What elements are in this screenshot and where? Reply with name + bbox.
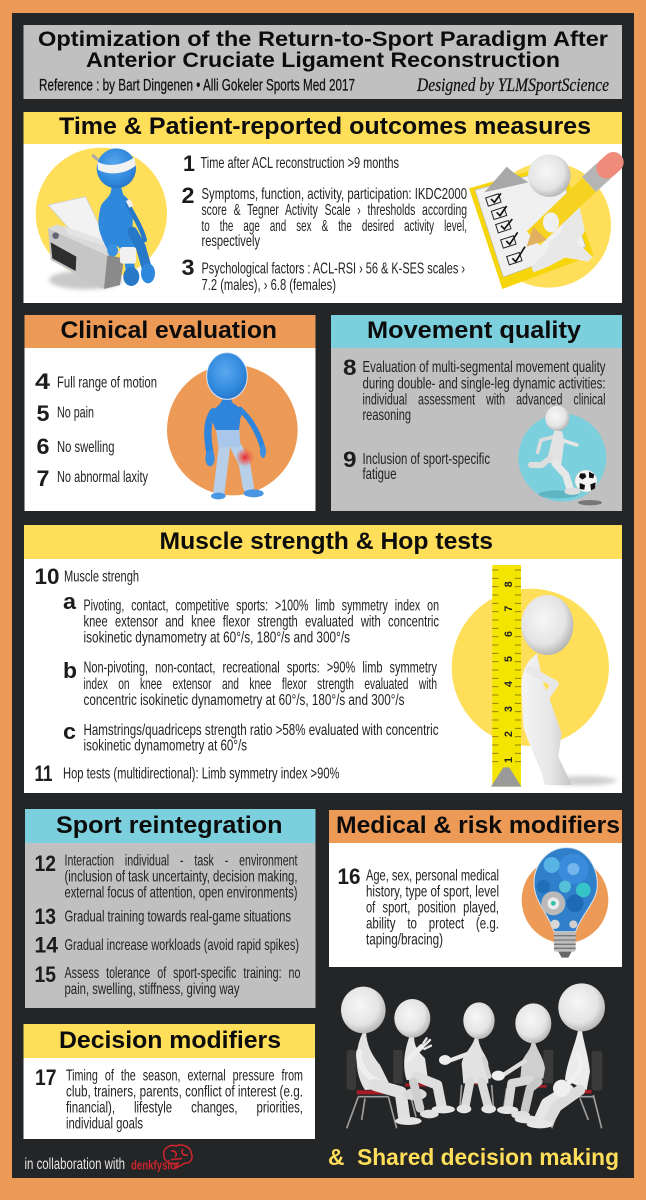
panel: clinical evaluation [24,315,316,511]
panel body [25,809,316,1008]
collaboration text: in collaboration with [24,1156,125,1173]
item b text: index on knee extensor and knee flexor strength evaluated with [84,676,437,693]
heading: Clinical evaluation [60,317,277,344]
heading: Sport reintegration [56,812,282,839]
item 4 text: Full range of motion [57,374,157,392]
item 15 text: pain, swelling, stiffness, giving way [64,981,240,998]
title panel background [24,25,622,99]
number 13: 13 [34,904,56,929]
illustration: figure leaning on measuring tape: 5 [503,656,515,662]
illustration: figure leaning on measuring tape: 7 [503,606,515,612]
shared decision making caption: & Shared decision making [328,1144,619,1170]
number 12: 12 [34,851,56,876]
number 8: 8 [343,355,356,380]
item a text: knee extensor and knee flexor strength evaluated with concentric [84,614,439,630]
item 14 text: Gradual increase workloads (avoid rapid spikes) [64,937,299,954]
item 12 text: external focus of attention, open environments) [64,884,298,902]
item 7 text: No abnormal laxity [57,469,148,486]
illustration: figure leaning on measuring tape: 1 [503,757,515,763]
item 2 text: respectively [202,233,260,250]
item 12 text: (inclusion of task uncertainty, decision making, [64,868,298,886]
item c text [84,722,438,754]
designer credit: Designed by YLMSportScience [416,75,609,96]
item 13 text: Gradual training towards real-game situations [64,908,291,926]
item 10 text: Muscle strengh [64,568,139,586]
letter c: c [63,719,76,744]
item 9 [343,447,490,483]
panel body [329,810,622,967]
number 1: 1 [183,151,195,176]
panel: movement quality [331,315,622,511]
heading: Time & Patient-reported outcomes measures [59,113,591,140]
item 17 text: club, trainers, parents, conflict of interest (e.g. [66,1084,303,1100]
item 16 text: ability to protect (e.g. [366,916,499,932]
illustration: figure leaning on measuring tape: 2 [503,731,515,737]
main title [38,28,608,72]
item 2 text: score & Tegner Activity Scale › thresholds according [202,202,467,219]
item 5 [36,401,94,426]
item 1 text: Time after ACL reconstruction >9 months [200,155,399,172]
item 7 [36,466,148,491]
letter b: b [63,658,77,683]
heading: Muscle strength & Hop tests [160,528,493,555]
item 2 text [202,186,467,250]
panel header [331,315,622,348]
item b [63,658,437,709]
item 16 text: history, type of sport, level [366,884,499,900]
item 2 text: to the age and sex & the desired activity level, [202,218,467,235]
panel header [25,809,316,843]
item c text: isokinetic dynamometry at 60°/s [84,738,247,754]
item c text: Hamstrings/quadriceps strength ratio >58% evaluated with concentric [84,722,438,739]
number 16: 16 [338,864,360,889]
panel: decision modifiers [24,1024,315,1139]
item 14 [34,932,299,958]
item c [63,719,438,754]
item 13 [34,904,291,929]
item 17 text: financial), lifestyle changes, priorities, [66,1100,303,1116]
illustration: injured figure on exam device [36,148,167,289]
number 15: 15 [34,962,56,987]
item 2 [182,183,467,250]
item 9 text: fatigue [362,466,397,483]
item 12 text [64,852,298,902]
item a text: Pivoting, contact, competitive sports: >100% limb symmetry index on [84,598,439,614]
figure 4 [492,1003,551,1119]
figure 1 [341,987,427,1125]
denkfysio name: denkfysio [131,1158,176,1172]
item 3 [182,255,465,294]
number 11: 11 [34,761,52,786]
chairs [347,1050,602,1128]
number 9: 9 [343,447,356,472]
number 7: 7 [36,466,50,491]
heading: Movement quality [367,317,582,344]
illustration: five figures in a discussion circle [341,983,605,1128]
panel header [329,810,622,843]
figure 5 [515,983,605,1128]
figure 2 [394,999,455,1118]
panel: muscle strength and hop tests [24,525,622,793]
heading: Medical & risk modifiers [336,812,620,839]
item 17 text: Timing of the season, external pressure from [66,1068,303,1084]
item 8 text [362,359,606,424]
item 8 [343,355,606,424]
panel body [331,315,622,511]
item b text: concentric isokinetic dynamometry at 60°/s, 180°/s and 300°/s [84,692,404,709]
panel: medical and risk modifiers [329,810,622,967]
illustration: blue figure with red knee [167,353,298,499]
number 5: 5 [36,401,50,426]
item 1 [183,151,399,176]
item 15 text [64,965,301,998]
illustration: figure leaning on measuring tape [452,565,617,787]
item b text: Non-pivoting, non-contact, recreational sports: >90% limb symmetry [84,660,437,676]
panel: sport reintegration [25,809,316,1008]
panel header [24,525,622,559]
illustration: figure kicking soccer ball [518,406,606,505]
illustration: figure leaning on measuring tape: 4 [503,681,515,687]
figure 3 [439,1002,496,1113]
panel body [24,525,622,793]
title block [24,25,622,99]
number 2: 2 [182,183,194,208]
item 9 text [362,451,490,483]
panel body [24,315,316,511]
illustration: figure leaning on measuring tape: 6 [503,631,515,637]
main title: Optimization of the Return-to-Sport Paradigm After [38,28,608,51]
panel header [24,315,316,348]
item a [63,589,439,646]
item 2 text: Symptoms, function, activity, participation: IKDC2000 [202,186,467,203]
illustration: figure leaning on measuring tape: 3 [503,706,515,712]
item 15 text: Assess tolerance of sport-specific training: no [64,965,301,982]
item 6 [36,434,114,459]
icon: brain logo [164,1145,192,1168]
illustration: figure writing on checklist with pencil [469,154,613,289]
number 10: 10 [34,564,60,589]
item a text [84,598,439,646]
item 15 [34,962,301,998]
collaboration credit [24,1145,192,1173]
item 11 text: Hop tests (multidirectional): Limb symmetry index >90% [63,766,340,782]
main title: Anterior Cruciate Ligament Reconstruction [86,49,560,72]
item 17 text [66,1068,303,1132]
number 17: 17 [35,1065,56,1090]
item 17 text: individual goals [66,1116,143,1132]
item 8 text: reasoning [362,407,411,424]
item 17 [35,1065,303,1132]
item 16 text: Age, sex, personal medical [366,868,499,884]
item a text: isokinetic dynamometry at 60°/s, 180°/s and 300°/s [84,630,350,646]
item 5 text: No pain [57,404,94,422]
heading: Decision modifiers [59,1027,281,1054]
item 3 text [202,260,465,294]
item 16 text [366,868,499,948]
illustration: light bulb with gears [522,848,608,958]
item 10 [34,564,139,589]
number 14: 14 [34,932,59,958]
item 16 [338,864,499,948]
reference line: Reference : by Bart Dingenen • Alli Gokeler Sports Med 2017 [39,76,355,94]
item 16 text: of sport, position played, [366,900,499,916]
letter a: a [63,589,77,614]
number 4: 4 [35,369,51,394]
panel body [24,1024,315,1139]
item 16 text: taping/bracing) [366,932,443,948]
item b text [84,660,437,709]
panel body [24,112,622,303]
item 3 text: Psychological factors : ACL-RSI › 56 & K-SES scales › [202,260,465,278]
item 11 [34,761,340,786]
item 4 [35,369,157,394]
item 12 text: Interaction individual - task - environment [64,852,298,870]
panel header [24,1024,315,1058]
number 3: 3 [182,255,194,280]
illustration: figure leaning on measuring tape: 8 [503,581,515,587]
panel header [24,112,622,144]
item 9 text: Inclusion of sport-specific [362,451,490,468]
item 12 [34,851,298,902]
number 6: 6 [36,434,50,459]
panel: time and patient-reported outcomes [24,112,622,303]
item 3 text: 7.2 (males), › 6.8 (females) [202,277,336,294]
item 6 text: No swelling [57,439,114,456]
